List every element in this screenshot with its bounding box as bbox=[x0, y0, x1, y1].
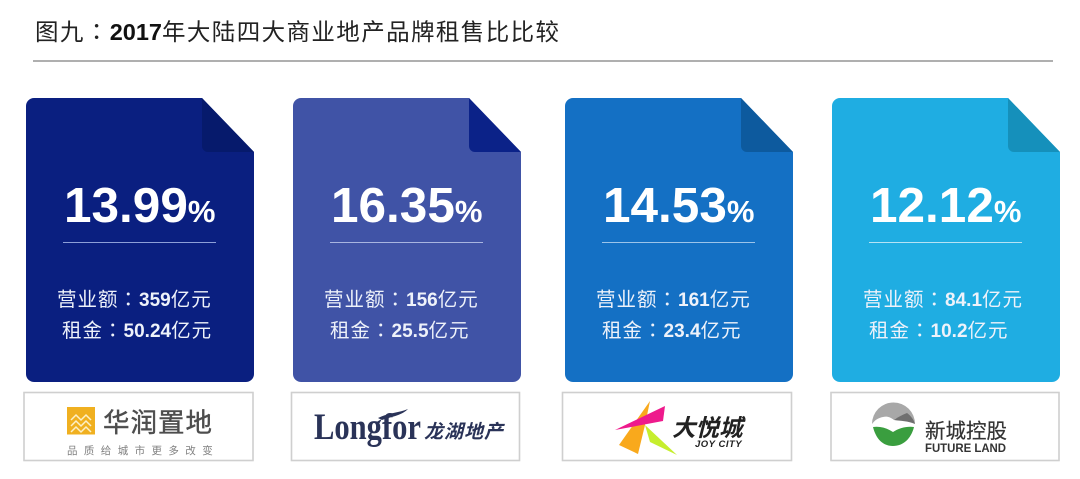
logo card: Joy City bbox=[562, 392, 792, 460]
panel: Future Land: 12.12% bbox=[870, 178, 1021, 233]
logo card: China Resources Land: 华润置地 bbox=[103, 408, 213, 438]
panel: Longfor bbox=[293, 98, 521, 382]
logo card: Longfor: 龙湖地产 bbox=[424, 421, 505, 443]
icon: orange mountain square bbox=[67, 407, 95, 434]
logo card: China Resources Land: 品质给城市更多改变 bbox=[67, 444, 219, 457]
panel: Joy City bbox=[565, 98, 793, 382]
logo card: Joy City: JOY CITY bbox=[695, 439, 743, 450]
panel: Future Land: 营业额：84.1亿元 bbox=[863, 283, 1023, 312]
icon: globe bbox=[872, 402, 915, 446]
panel: China Resources Land: 租金：50.24亿元 bbox=[62, 314, 212, 343]
logo card: Joy City: 大悦城 bbox=[672, 415, 746, 441]
logo card: Future Land: 新城控股 bbox=[925, 420, 1007, 443]
panel: Longfor: 16.35% bbox=[331, 178, 482, 233]
panel: China Resources Land bbox=[26, 98, 254, 382]
title: 图九：2017年大陆四大商业地产品牌租售比比较 bbox=[35, 13, 560, 47]
logo card: Longfor bbox=[292, 392, 520, 460]
panel: Longfor: 营业额：156亿元 bbox=[324, 283, 479, 312]
logo card: Longfor: Longfor bbox=[314, 407, 421, 448]
panel: China Resources Land: 营业额：359亿元 bbox=[57, 283, 212, 312]
panel: Longfor: 租金：25.5亿元 bbox=[330, 314, 470, 343]
logo card: China Resources Land bbox=[24, 392, 253, 460]
panel: China Resources Land: 13.99% bbox=[64, 178, 215, 233]
icon: star bbox=[615, 401, 677, 455]
logo card: Future Land: FUTURE LAND bbox=[925, 441, 1006, 455]
panel: Future Land bbox=[832, 98, 1060, 382]
panel: Future Land: 租金：10.2亿元 bbox=[869, 314, 1009, 343]
logo card: Future Land bbox=[831, 392, 1059, 460]
panel: Joy City: 营业额：161亿元 bbox=[596, 283, 751, 312]
panel: Joy City: 租金：23.4亿元 bbox=[602, 314, 742, 343]
panel: Joy City: 14.53% bbox=[603, 178, 754, 233]
